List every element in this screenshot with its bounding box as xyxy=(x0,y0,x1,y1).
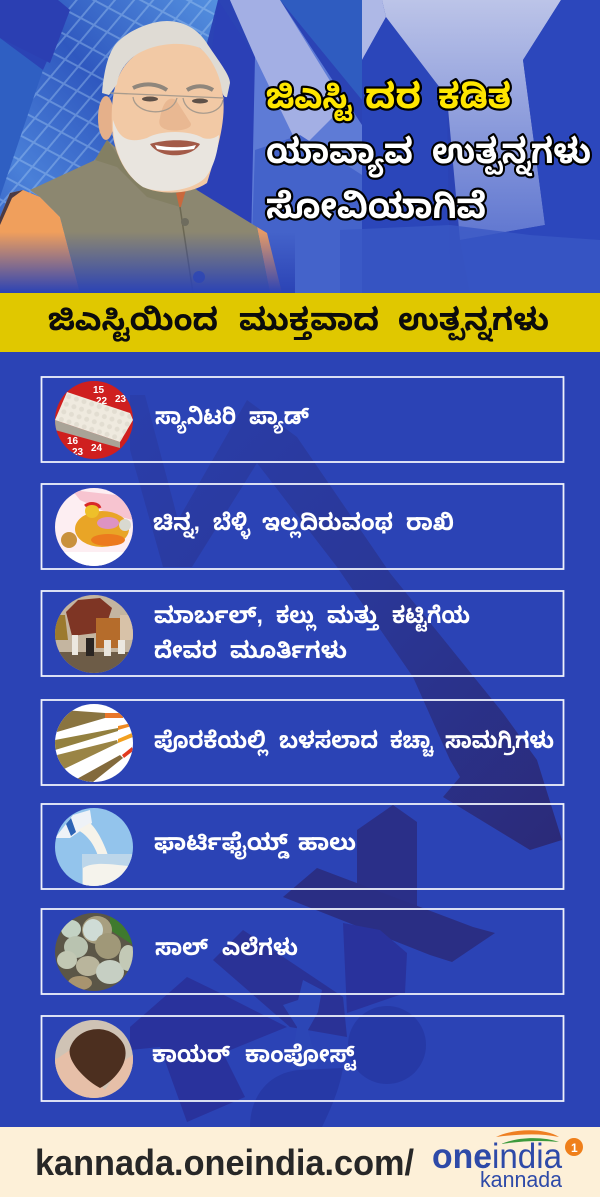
logo: oneindia kannada: kannada xyxy=(480,1167,563,1192)
logo: oneindia kannada: one xyxy=(432,1137,492,1176)
footer url: kannada.oneindia.com/ xyxy=(35,1142,414,1183)
card: idols: ಕಲ್ಲು xyxy=(276,602,317,632)
icon: sanitary pad: 16 xyxy=(67,436,79,447)
mouth xyxy=(150,140,200,155)
glasses xyxy=(110,93,224,113)
heading band: ಮುಕ್ತವಾದ xyxy=(239,302,379,341)
title line 2 xyxy=(266,132,591,178)
icon: sal leaf bundles xyxy=(55,913,137,991)
icon: sanitary pad: 22 xyxy=(96,396,108,407)
title line 3: ಸೋವಿಯಾಗಿವೆ xyxy=(266,187,486,226)
icon: sanitary pad xyxy=(55,381,133,459)
card: sanitary pad xyxy=(42,377,564,462)
heading band xyxy=(0,293,600,352)
card: coir compost: ಕಾಯರ್ xyxy=(152,1041,231,1067)
card: sanitary pad: ಸ್ಯಾನಿಟರಿ xyxy=(155,403,236,434)
card: fortified milk xyxy=(42,804,564,889)
icon: compost in hand xyxy=(55,1020,133,1098)
portrait: man in grey vest xyxy=(0,21,295,293)
panel: footer xyxy=(0,1127,600,1197)
icon: sanitary pad: 23 xyxy=(72,447,84,458)
icon: sanitary pad: 24 xyxy=(91,443,103,454)
card: idols: ಮಾರ್ಬಲ್, xyxy=(154,602,263,628)
card: fortified milk: ಹಾಲು xyxy=(298,829,356,855)
logo: oneindia kannada: india xyxy=(492,1137,563,1176)
card: idols: ಮೂರ್ತಿಗಳು xyxy=(230,637,347,663)
icon: rakhi xyxy=(55,488,133,566)
card: rakhi: ಚಿನ್ನ, xyxy=(153,509,200,539)
title line 1: ಜಿಎಸ್ಟಿ xyxy=(266,77,353,122)
card: broom raw materials: ಸಾಮಗ್ರಿಗಳು xyxy=(445,727,554,756)
card: coir compost xyxy=(42,1016,564,1101)
icon: brooms xyxy=(55,704,133,782)
card: fortified milk: ಫಾರ್ಟಿಫೈಯ್ಡ್ xyxy=(154,829,291,860)
title: headline xyxy=(266,77,591,226)
title line 1 xyxy=(266,77,511,122)
nose xyxy=(159,99,191,131)
heading band: ಉತ್ಪನ್ನಗಳು xyxy=(398,302,549,342)
heading band: ಜಿಎಸ್ಟಿಯಿಂದ xyxy=(48,302,218,342)
card: idols xyxy=(42,591,564,676)
title line 2: ಉತ್ಪನ್ನಗಳು xyxy=(432,132,591,177)
icon: idols xyxy=(55,595,133,673)
title line 1: ಕಡಿತ xyxy=(438,77,511,116)
card: idols: ದೇವರ xyxy=(154,637,217,663)
card: rakhi: ರಾಖಿ xyxy=(406,509,454,535)
logo: oneindia kannada: 1 xyxy=(571,1141,578,1155)
title line 1: ದರ xyxy=(365,77,421,116)
icon: milk xyxy=(55,808,133,888)
card: broom raw materials: ಪೊರಕೆಯಲ್ಲಿ xyxy=(154,727,269,757)
card: sal leaves: ಸಾಲ್ xyxy=(155,934,209,960)
card: idols: ಕಟ್ಟಿಗೆಯ xyxy=(392,602,470,632)
face xyxy=(98,96,114,140)
card: broom raw materials xyxy=(42,700,564,785)
logo: oneindia kannada xyxy=(432,1130,583,1192)
icon: sanitary pad: 15 xyxy=(93,385,105,396)
card: idols: ಮತ್ತು xyxy=(327,602,380,631)
card: coir compost: ಕಾಂಪೋಸ್ಟ್ xyxy=(245,1041,357,1071)
hair xyxy=(102,21,230,97)
card: broom raw materials: ಕಚ್ಚಾ xyxy=(390,727,435,757)
card: sanitary pad: ಪ್ಯಾಡ್ xyxy=(249,403,309,434)
card: sal leaves: ಎಲೆಗಳು xyxy=(222,934,298,960)
card: rakhi: ಇಲ್ಲದಿರುವಂಥ xyxy=(262,509,393,539)
card: rakhi: ಬೆಳ್ಳಿ xyxy=(213,509,251,540)
icon: sanitary pad: 23 xyxy=(115,394,127,405)
panel: body background with faded arrow xyxy=(0,352,600,1127)
card: sal leaves xyxy=(42,909,564,994)
card: broom raw materials: ಬಳಸಲಾದ xyxy=(279,727,378,753)
beard xyxy=(113,120,219,191)
title line 2: ಯಾವ್ಯಾವ xyxy=(266,132,413,178)
panel: header photo background of buildings xyxy=(0,0,600,293)
card: rakhi xyxy=(42,484,564,569)
